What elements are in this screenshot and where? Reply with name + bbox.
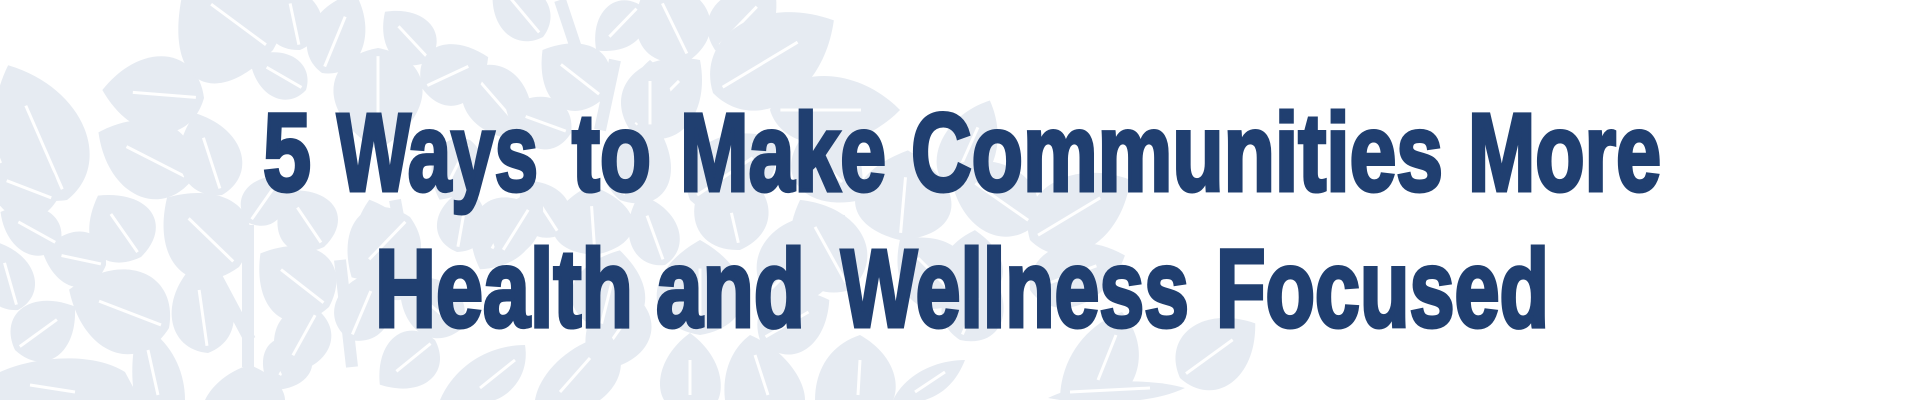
- title: [263, 92, 1661, 350]
- title line 1: Communities: [911, 92, 1443, 214]
- title line 2: Wellness: [841, 228, 1189, 350]
- title line 2: Health: [375, 228, 633, 350]
- title line 1: to: [572, 92, 651, 214]
- background: leaf pattern: [0, 0, 1275, 400]
- title line 2: and: [656, 228, 805, 350]
- title line 1: Ways: [337, 92, 538, 214]
- title line 1: [263, 92, 1661, 214]
- title line 2: [375, 228, 1549, 350]
- title line 1: More: [1468, 92, 1661, 214]
- title line 1: Make: [680, 92, 886, 214]
- title line 2: Focused: [1216, 228, 1549, 350]
- title line 1: 5: [263, 92, 311, 214]
